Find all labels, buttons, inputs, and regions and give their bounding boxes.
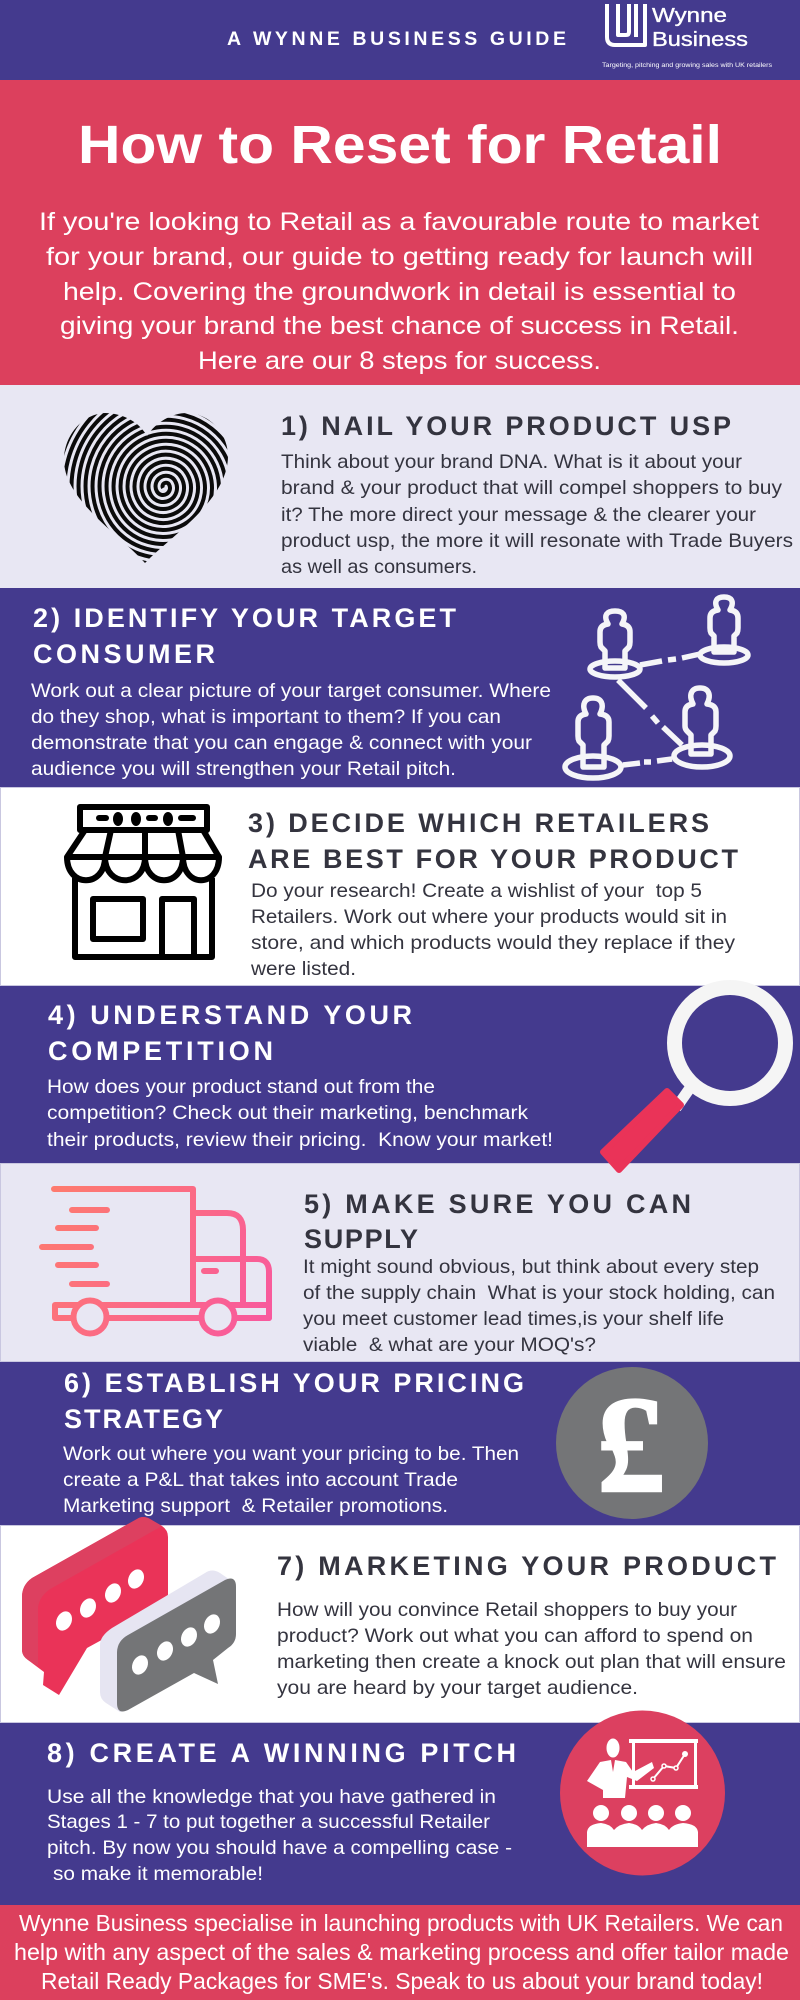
step 1 heading: 1) NAIL YOUR PRODUCT USP — [281, 411, 731, 441]
step 5 text: It might sound obvious, but think about every step — [303, 1256, 759, 1278]
step 2 text: Work out a clear picture of your target consumer. Where — [31, 680, 551, 702]
step 3 heading — [248, 808, 738, 874]
step 6 heading — [64, 1368, 524, 1434]
step 8 heading: 8) CREATE A WINNING PITCH — [47, 1738, 516, 1768]
panel: step 8 — [0, 1710, 800, 1905]
footer call to action: Wynne Business specialise in launching products with UK Retailers. We can — [19, 1910, 783, 1936]
intro text: If you're looking to Retail as a favourable route to market — [39, 208, 759, 236]
panel: step 5 — [0, 1164, 800, 1362]
icon: pound coin — [556, 1367, 708, 1521]
icon: connected people — [565, 597, 748, 778]
step 4 heading: 4) UNDERSTAND YOUR — [48, 1000, 412, 1030]
panel: step 6 — [0, 1362, 800, 1525]
step 3 text: Do your research! Create a wishlist of your top 5 — [251, 880, 702, 902]
step 8 text — [47, 1786, 512, 1885]
logo: Wynne Business — [602, 4, 773, 69]
step 1 text — [281, 451, 793, 578]
step 2 text: do they shop, what is important to them? If you can — [31, 706, 501, 728]
step 6 text: Work out where you want your pricing to be. Then — [63, 1443, 519, 1465]
step 3 text: store, and which products would they replace if they — [251, 932, 735, 954]
step 1 text: brand & your product that will compel shoppers to buy — [281, 477, 782, 499]
step 3 heading: ARE BEST FOR YOUR PRODUCT — [248, 844, 738, 874]
icon: fingerprint heart — [64, 413, 228, 563]
step 8 text: so make it memorable! — [53, 1863, 263, 1885]
intro text: giving your brand the best chance of success in Retail. — [60, 312, 739, 340]
step 7 text — [277, 1599, 786, 1699]
icon: shop front — [67, 807, 219, 957]
footer call to action — [0, 1905, 800, 2000]
step 5 text: you meet customer lead times,is your shelf life — [303, 1308, 724, 1330]
icon: pound coin: £ — [597, 1368, 665, 1521]
panel: step 1 — [0, 385, 800, 588]
panel: step 7 — [0, 1517, 800, 1722]
step 4 text: How does your product stand out from the — [47, 1076, 435, 1098]
intro text: help. Covering the groundwork in detail is essential to — [63, 278, 736, 306]
guide label: A WYNNE BUSINESS GUIDE — [227, 28, 566, 50]
step 1 text: as well as consumers. — [281, 556, 477, 578]
step 3 text — [250, 880, 735, 980]
step 4 text: their products, review their pricing. Know your market! — [47, 1129, 553, 1151]
step 7 text: How will you convince Retail shoppers to buy your — [277, 1599, 738, 1621]
intro text: for your brand, our guide to getting ready for launch will — [46, 243, 753, 271]
step 2 text: demonstrate that you can engage & connect with your — [31, 732, 533, 754]
step 5 heading: SUPPLY — [304, 1224, 418, 1254]
icon: speech bubbles — [22, 1517, 236, 1712]
step 5 text: of the supply chain What is your stock holding, can — [303, 1282, 775, 1304]
step 3 text: Retailers. Work out where your products would sit in — [251, 906, 727, 928]
footer call to action: help with any aspect of the sales & marketing process and offer tailor made — [14, 1939, 789, 1965]
intro text: Here are our 8 steps for success. — [198, 347, 601, 375]
red bubble — [22, 1517, 168, 1695]
panel: step 4 — [0, 986, 800, 1170]
step 6 heading: STRATEGY — [64, 1404, 223, 1434]
step 1 text: product usp, the more it will resonate with Trade Buyers — [281, 530, 793, 552]
intro text — [39, 208, 759, 375]
step 8 text: Use all the knowledge that you have gathered in — [47, 1786, 496, 1808]
icon: magnifying glass — [603, 988, 786, 1170]
step 6 text — [63, 1443, 519, 1517]
step 7 text: you are heard by your target audience. — [277, 1677, 638, 1699]
icon: delivery truck — [42, 1189, 269, 1334]
step 2 text: audience you will strengthen your Retail pitch. — [31, 758, 456, 780]
step 4 text — [47, 1076, 553, 1151]
step 1 text: Think about your brand DNA. What is it about your — [281, 451, 743, 473]
logo: Wynne Business: Wynne — [652, 5, 727, 27]
step 3 heading: 3) DECIDE WHICH RETAILERS — [248, 808, 709, 838]
footer call to action: Retail Ready Packages for SME's. Speak to us about your brand today! — [41, 1968, 763, 1994]
step 4 heading — [48, 1000, 412, 1066]
grey bubble — [100, 1570, 236, 1712]
step 2 heading: 2) IDENTIFY YOUR TARGET — [33, 603, 456, 633]
panel: step 2 — [0, 588, 800, 787]
panel: intro — [0, 80, 800, 385]
step 3 text: were listed. — [250, 958, 356, 980]
step 4 text: competition? Check out their marketing, benchmark — [47, 1102, 528, 1124]
step 6 heading: 6) ESTABLISH YOUR PRICING — [64, 1368, 524, 1398]
step 2 heading — [33, 603, 456, 669]
step 6 text: create a P&L that takes into account Trade — [63, 1469, 458, 1491]
panel: step 3 — [0, 788, 800, 986]
step 8 text: Stages 1 - 7 to put together a successful Retailer — [47, 1811, 491, 1833]
title: How to Reset for Retail — [78, 115, 722, 175]
step 7 heading: 7) MARKETING YOUR PRODUCT — [277, 1551, 776, 1581]
step 7 text: marketing then create a knock out plan that will ensure — [277, 1651, 786, 1673]
step 5 heading — [304, 1189, 691, 1254]
step 5 heading: 5) MAKE SURE YOU CAN — [304, 1189, 691, 1219]
logo: Wynne Business: Business — [652, 29, 748, 51]
step 5 text: viable & what are your MOQ's? — [303, 1334, 596, 1356]
step 7 text: product? Work out what you can afford to spend on — [277, 1625, 753, 1647]
step 4 heading: COMPETITION — [48, 1036, 273, 1066]
step 6 text: Marketing support & Retailer promotions. — [63, 1495, 448, 1517]
step 8 text: pitch. By now you should have a compelling case - — [47, 1837, 512, 1859]
step 2 text — [31, 680, 551, 780]
step 5 text — [303, 1256, 775, 1356]
icon: presenter with audience — [560, 1710, 725, 1876]
step 1 text: it? The more direct your message & the clearer your — [281, 504, 757, 526]
header band — [0, 0, 800, 80]
logo: Wynne Business: Targeting, pitching and growing sales with UK retailers — [602, 62, 773, 69]
step 2 heading: CONSUMER — [33, 639, 215, 669]
